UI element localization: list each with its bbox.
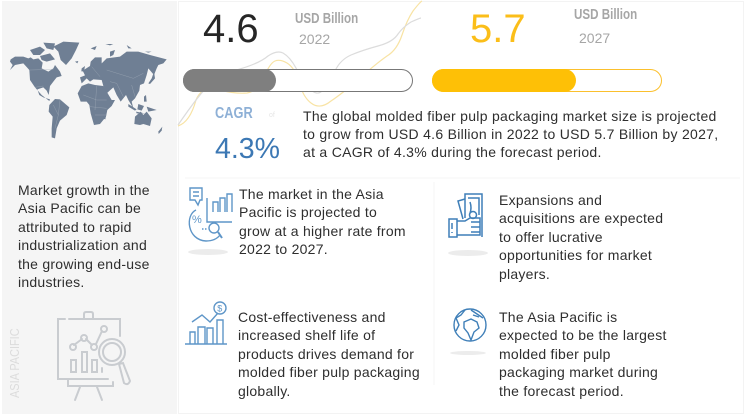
text: cost-effectiveness — [238, 309, 420, 399]
panel: right frame — [178, 1, 744, 414]
label: USD Billion 2027 — [574, 7, 637, 46]
text: expansions: to offer lucrative — [499, 229, 603, 245]
text: largest market — [499, 309, 667, 399]
text: cost-effectiveness: products drives demand for — [238, 346, 414, 362]
text: expansions — [499, 192, 663, 282]
panel: left sidebar — [2, 1, 177, 414]
text: expansions: acquisitions are expected — [499, 210, 663, 226]
label: of: of — [269, 112, 275, 119]
icon: growth bars with dollar: $ — [217, 304, 222, 314]
value: 4.6: 4.6 — [203, 7, 259, 51]
text: cost-effectiveness: globally. — [238, 383, 291, 399]
text: market growth note: industrialization and — [18, 237, 147, 253]
icon: hand holding cash — [448, 193, 488, 256]
icon: percent chart — [188, 187, 233, 255]
text: largest market: packaging market during — [499, 364, 658, 380]
text: largest market: expected to be the largest — [499, 327, 667, 343]
text: market summary: The global molded fiber pulp packaging market size is projected — [303, 108, 717, 124]
label: USD Billion 2022 — [295, 11, 358, 47]
text: largest market: the forecast period. — [499, 383, 624, 399]
label: USD Billion 2022: 2022 — [299, 31, 330, 47]
text: Asia Pacific growth: The market in the Asia — [239, 186, 384, 202]
label: USD Billion 2027: 2027 — [579, 30, 610, 46]
value: 4.3%: 4.3% — [215, 133, 280, 165]
icon: growth bars with dollar — [185, 301, 227, 345]
text: cost-effectiveness: molded fiber pulp packaging — [238, 364, 420, 380]
text: market growth note — [18, 182, 150, 290]
icon: presentation board with magnifier — [57, 311, 131, 401]
text: cost-effectiveness: increased shelf life of — [238, 327, 375, 343]
text: Asia Pacific growth: 2022 to 2027. — [239, 241, 328, 257]
icon: globe — [450, 308, 487, 355]
label: USD Billion 2022: USD Billion — [295, 11, 358, 27]
text: largest market: The Asia Pacific is — [499, 309, 617, 325]
label: Asia Pacific: ASIA PACIFIC — [7, 328, 22, 398]
text: largest market: molded fiber pulp — [499, 346, 611, 362]
text: expansions: opportunities for market — [499, 247, 652, 263]
world map — [10, 42, 167, 138]
text: market growth note: Asia Pacific can be — [18, 200, 141, 216]
text: market growth note: Market growth in the — [18, 182, 150, 198]
text: market growth note: the growing end-use — [18, 256, 150, 272]
label: CAGR: CAGR — [215, 105, 253, 122]
progress bar: 2027 — [432, 69, 662, 92]
label: USD Billion 2027: USD Billion — [574, 7, 637, 23]
progress bar: 2022 — [183, 69, 413, 92]
text: cost-effectiveness: Cost-effectiveness and — [238, 309, 386, 325]
text: Asia Pacific growth: Pacific is projected to — [239, 204, 377, 220]
value: 5.7: 5.7 — [470, 7, 526, 51]
icon: percent chart: % — [192, 214, 202, 226]
text: expansions: Expansions and — [499, 192, 602, 208]
text: Asia Pacific growth — [239, 186, 406, 257]
text: market summary: at a CAGR of 4.3% during the forecast period. — [303, 144, 602, 160]
text: expansions: players. — [499, 266, 550, 282]
text: Asia Pacific growth: grow at a higher rate from — [239, 223, 406, 239]
text: market growth note: attributed to rapid — [18, 219, 132, 235]
text: market summary: to grow from USD 4.6 Billion in 2022 to USD 5.7 Billion by 2027, — [303, 126, 718, 142]
text: market summary — [303, 108, 718, 160]
text: market growth note: industries. — [18, 274, 85, 290]
